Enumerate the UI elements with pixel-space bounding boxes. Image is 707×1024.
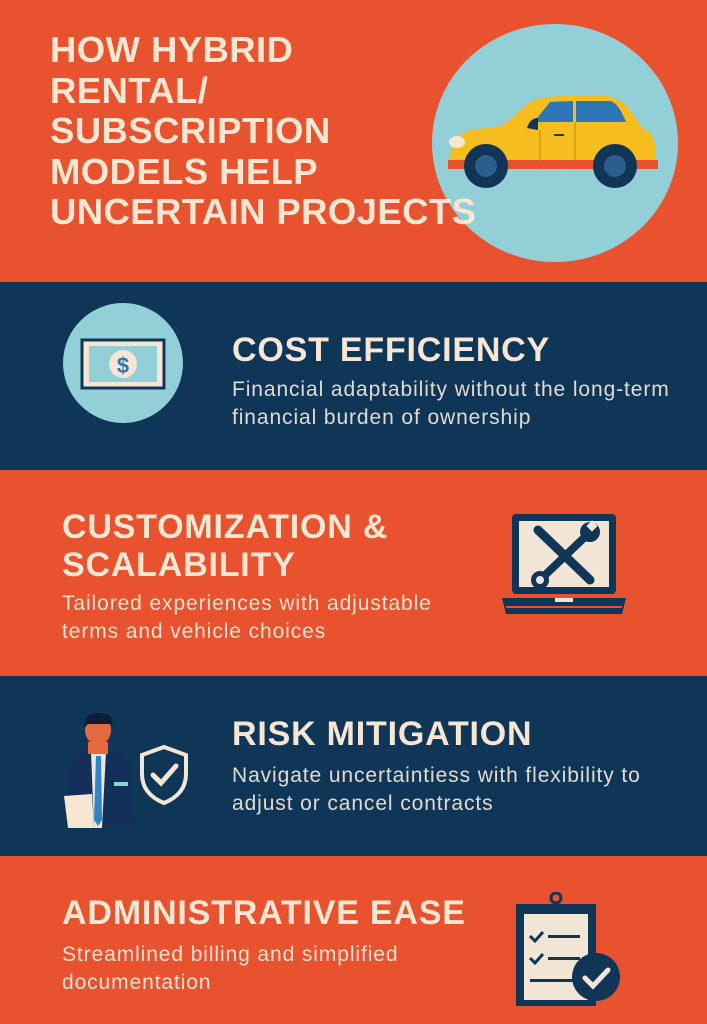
- text block: [232, 764, 641, 815]
- heading: CUSTOMIZATION &: [62, 508, 388, 546]
- text block: financial burden of ownership: [232, 406, 531, 429]
- icon: person with clipboard: [64, 713, 128, 828]
- icon: laptop with tools: [502, 514, 626, 614]
- text block: Streamlined billing and simplified: [62, 943, 398, 966]
- text block: [62, 943, 398, 994]
- title: HOW HYBRID: [50, 29, 293, 70]
- heading: RISK MITIGATION: [232, 715, 532, 753]
- title: RENTAL/: [50, 70, 208, 110]
- panel: cost efficiency: [0, 282, 707, 470]
- text block: adjust or cancel contracts: [232, 792, 494, 815]
- icon: money bill: [63, 303, 183, 423]
- text block: Financial adaptability without the long-term: [232, 378, 670, 401]
- text block: documentation: [62, 971, 211, 994]
- text block: terms and vehicle choices: [62, 620, 326, 643]
- title: UNCERTAIN PROJECTS: [50, 191, 476, 232]
- text block: [62, 592, 432, 643]
- heading: [62, 508, 388, 584]
- heading: SCALABILITY: [62, 546, 296, 584]
- heading: ADMINISTRATIVE EASE: [62, 894, 466, 932]
- title: SUBSCRIPTION: [50, 110, 331, 151]
- title: MODELS HELP: [50, 150, 318, 192]
- text block: Navigate uncertaintiess with flexibility to: [232, 764, 641, 787]
- icon: money bill: $: [117, 353, 129, 378]
- icon: clipboard checklist: [516, 892, 620, 1006]
- panel: administrative ease: [0, 856, 707, 1024]
- heading: COST EFFICIENCY: [232, 331, 550, 369]
- header panel: [0, 0, 707, 282]
- title: [50, 29, 476, 232]
- icon: shield check: [140, 744, 188, 806]
- text block: Tailored experiences with adjustable: [62, 592, 432, 615]
- text block: [232, 378, 670, 429]
- panel: risk mitigation: [0, 676, 707, 856]
- icon: car in circle: [432, 24, 678, 262]
- panel: customization: [0, 470, 707, 676]
